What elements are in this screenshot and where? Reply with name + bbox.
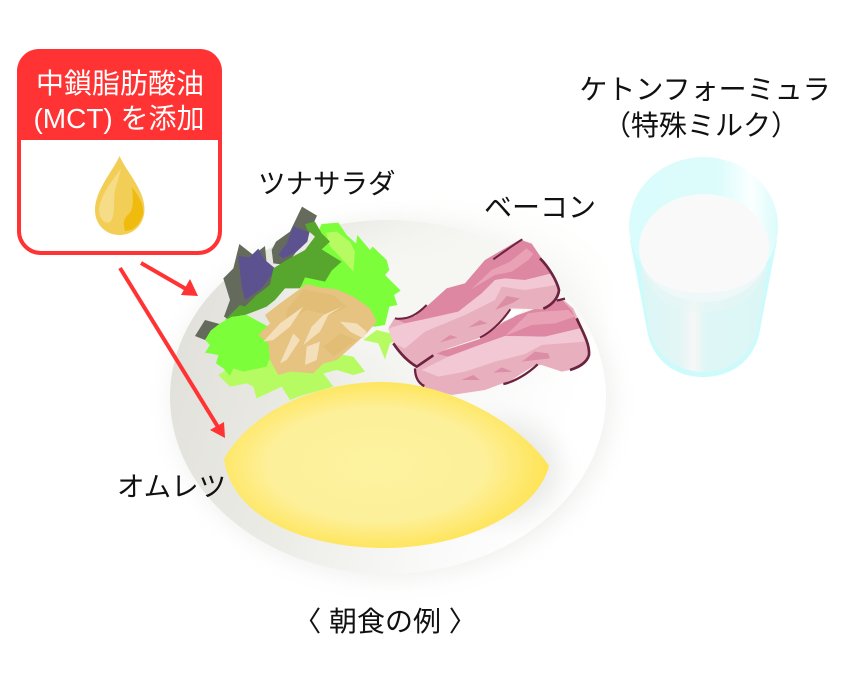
arrow: to salad [141,263,198,296]
icon: glass of milk [629,157,778,377]
label: ketone formula: ケトンフォーミュラ [579,74,831,105]
callout title: 中鎖脂肪酸油 [36,68,204,99]
light leaves [218,340,365,400]
arrow: to omelette [120,268,225,438]
dark green leaves [225,222,342,320]
tuna [258,284,377,375]
label: tuna salad: ツナサラダ [258,168,396,199]
back strip [415,298,589,395]
icon: tuna salad [195,207,403,400]
callout title: (MCT) を添加 [33,103,205,134]
label: bacon: ベーコン [484,192,596,223]
caption: 〈 朝食の例 〉 [293,606,477,637]
icon: oil drop [95,156,144,235]
panel: MCT callout [17,49,222,253]
icon: bacon [388,239,589,395]
plate [170,220,612,578]
front strip [388,239,559,366]
panel header [17,49,222,140]
label: ketone formula: （特殊ミルク） [603,110,799,141]
callout title [33,68,205,134]
label: ketone formula [579,74,831,141]
dark leaves [195,207,317,348]
icon: omelette [224,382,549,548]
bright leaves [300,223,401,327]
purple leaves [238,226,309,300]
label: omelette: オムレツ [117,471,226,502]
